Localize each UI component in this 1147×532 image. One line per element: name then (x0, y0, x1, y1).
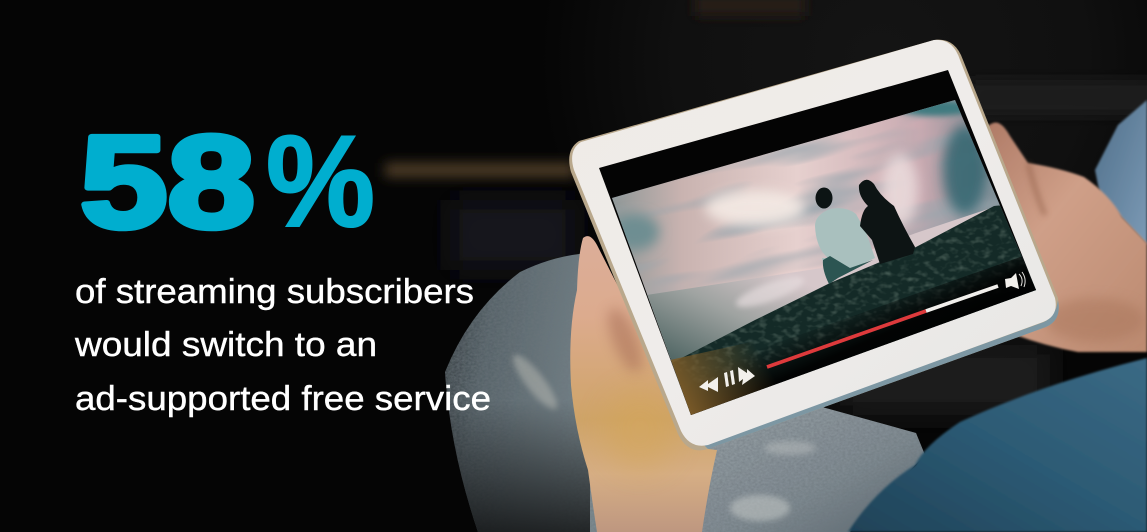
couple silhouette (815, 180, 915, 284)
icon: fast forward (738, 367, 755, 385)
icon: rewind (699, 377, 718, 392)
man (815, 188, 875, 284)
icon: pause (724, 370, 735, 387)
tablet body (572, 40, 1056, 446)
shirt (848, 358, 1147, 532)
jeans: left leg (445, 254, 597, 532)
player controls (699, 272, 1025, 392)
description text: of streaming subscribers (75, 273, 474, 311)
jeans: right leg (1095, 100, 1147, 245)
tablet (569, 40, 1059, 450)
statistic: 58%: % (266, 108, 375, 254)
video (612, 100, 1036, 415)
orange light streak (385, 163, 575, 177)
progress bar elapsed (767, 311, 926, 367)
progress bar remaining (926, 286, 998, 311)
control bar fade (685, 256, 1036, 415)
screen (599, 70, 1036, 415)
description text: would switch to an (74, 326, 377, 364)
icon: speaker (1005, 273, 1019, 289)
jeans: lower middle (690, 407, 925, 532)
sea (647, 205, 1000, 362)
woman (859, 180, 915, 264)
tablet edge (569, 40, 1059, 450)
description text (74, 273, 491, 418)
clouds (612, 100, 1022, 362)
left hand (570, 236, 717, 532)
right hand (960, 122, 1147, 352)
statistic: 58% (80, 108, 375, 255)
statistic: 58%: 58 (80, 108, 255, 255)
description text: ad-supported free service (75, 380, 491, 418)
ground (672, 205, 1036, 415)
